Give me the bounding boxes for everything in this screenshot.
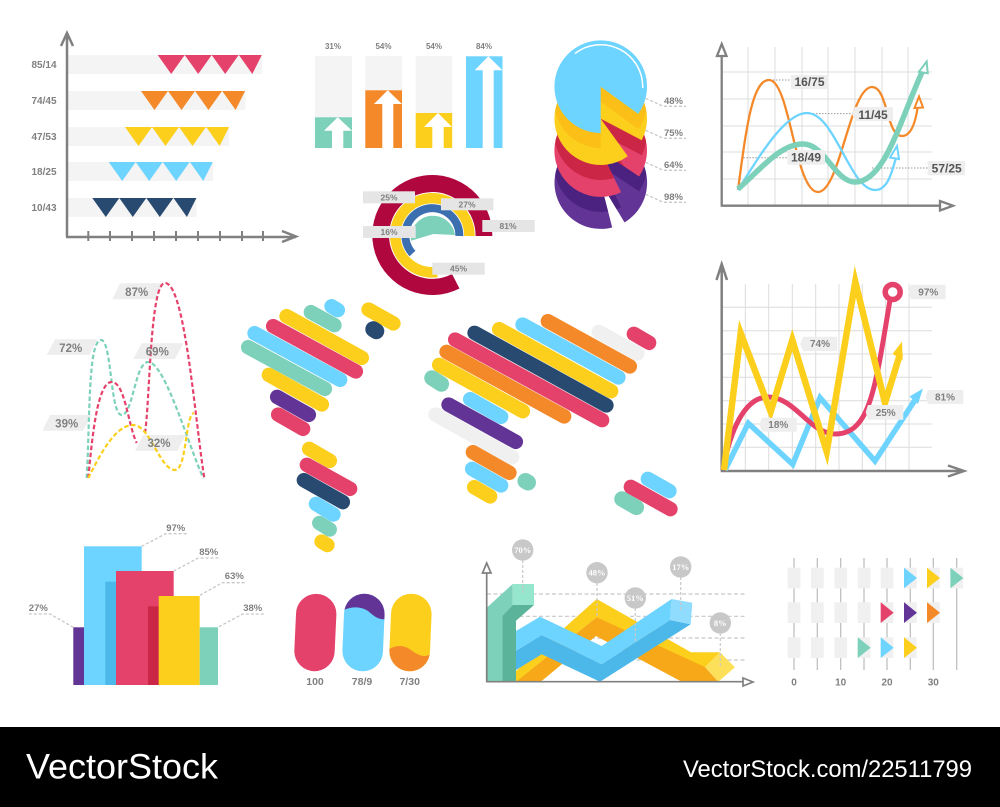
red dashed curve short bbox=[88, 382, 137, 478]
yellow ribbon bbox=[516, 599, 720, 682]
red curve with ring bbox=[723, 284, 900, 470]
callout 48%: 48% bbox=[588, 568, 606, 578]
purple bar bbox=[73, 627, 84, 685]
axis numbers: 30 bbox=[928, 678, 939, 688]
bar 31%: 31% bbox=[325, 42, 341, 51]
yellow zigzag line bbox=[724, 282, 903, 470]
axes bbox=[482, 563, 753, 686]
leader lines bbox=[27, 534, 264, 627]
callout drop lines bbox=[523, 560, 720, 667]
mint curve bbox=[738, 62, 928, 189]
blue ribbon underside bbox=[516, 620, 691, 682]
row labels: 85/14 bbox=[31, 60, 57, 71]
mint pillar dark bbox=[502, 605, 534, 682]
blue curve bbox=[738, 113, 899, 190]
axis numbers: 10 bbox=[835, 678, 847, 688]
pie labels: 64% bbox=[664, 160, 684, 171]
slider blocks bbox=[788, 568, 963, 658]
footer image id: VectorStock.com/22511799 bbox=[683, 756, 972, 783]
arrow markers row 2 bbox=[881, 602, 940, 623]
label plates bbox=[42, 283, 186, 451]
panel: stacked pie charts bbox=[554, 40, 686, 229]
blue shadow bbox=[105, 582, 116, 685]
red shadow bbox=[148, 606, 159, 685]
row labels: 10/43 bbox=[31, 203, 57, 214]
yellow pie bbox=[554, 72, 647, 165]
bar labels: 97% bbox=[166, 523, 186, 534]
row labels bbox=[31, 60, 57, 214]
percentage labels: 32% bbox=[147, 438, 171, 450]
bar labels bbox=[29, 523, 263, 614]
red dashed curve tall bbox=[145, 283, 204, 478]
axis numbers: 0 bbox=[791, 678, 797, 688]
labels: 25% bbox=[380, 192, 398, 202]
footer bar bbox=[0, 727, 1000, 807]
triangles row 10/43 bbox=[92, 198, 196, 217]
panel: smooth line chart bbox=[717, 44, 965, 210]
capsule 100: 100 bbox=[306, 676, 324, 688]
panel: capsule gauges bbox=[294, 594, 432, 685]
mint pillar side bbox=[487, 584, 513, 682]
labels: 57/25 bbox=[932, 161, 962, 175]
bar 84%: 84% bbox=[476, 42, 492, 51]
leader dots bbox=[743, 80, 928, 168]
blue zigzag line bbox=[725, 388, 923, 470]
labels bbox=[759, 285, 963, 432]
blue ribbon end bbox=[670, 599, 692, 624]
capsule 7/30: 7/30 bbox=[399, 676, 420, 688]
purple pie bbox=[555, 136, 647, 229]
callout 70% bbox=[512, 539, 533, 561]
labels: 16% bbox=[380, 227, 398, 237]
triangles row 74/45 bbox=[141, 91, 245, 110]
crimson ring bbox=[372, 175, 492, 295]
labels: 18/49 bbox=[791, 150, 821, 164]
panel: striped world map bbox=[248, 306, 670, 545]
pie labels: 75% bbox=[664, 128, 684, 139]
callout 51% bbox=[625, 587, 646, 609]
percentage labels: 39% bbox=[55, 418, 78, 430]
axes bbox=[717, 44, 953, 210]
triangles row 47/53 bbox=[125, 127, 229, 146]
callout 8% bbox=[710, 612, 731, 634]
bar labels: 27% bbox=[29, 603, 48, 614]
Eurasia and Africa stripes bbox=[432, 321, 649, 496]
triangles row 85/14 bbox=[158, 55, 262, 74]
panel: triangle row chart bbox=[31, 33, 296, 242]
blue bar bbox=[84, 546, 142, 685]
callout 17% bbox=[670, 556, 691, 578]
yellow bar bbox=[159, 596, 200, 685]
pie labels bbox=[664, 96, 684, 203]
highlight bbox=[575, 45, 643, 88]
capsule 78/9: 78/9 bbox=[352, 676, 372, 688]
panel: 3D ribbon chart bbox=[482, 539, 753, 686]
blue ring bbox=[405, 208, 459, 254]
panel: overlapping bar chart bbox=[27, 523, 264, 685]
arrow markers row 3 bbox=[858, 637, 917, 658]
axis numbers bbox=[791, 678, 939, 688]
Australia stripes bbox=[622, 479, 670, 509]
arrow markers row 1 bbox=[904, 568, 963, 588]
red pie bbox=[554, 104, 647, 197]
pie labels: 48% bbox=[664, 96, 684, 107]
labels: 16/75 bbox=[794, 75, 825, 89]
blue pie bbox=[554, 40, 647, 133]
red shadow bbox=[555, 119, 646, 180]
labels: 27% bbox=[458, 199, 476, 209]
bar 54% orange bbox=[365, 42, 402, 148]
bar 84% bbox=[466, 42, 502, 148]
panel: dashed curve chart bbox=[42, 283, 204, 478]
yellow shadow bbox=[555, 87, 646, 148]
mint dashed curve bbox=[87, 340, 203, 478]
red bar bbox=[116, 571, 174, 685]
axis numbers: 20 bbox=[881, 678, 893, 688]
footer brand: VectorStock bbox=[26, 748, 219, 787]
percentage labels: 87% bbox=[125, 287, 148, 299]
leader lines bbox=[646, 98, 686, 202]
triangles row 18/25 bbox=[109, 162, 213, 181]
grid bbox=[722, 47, 932, 205]
percentage labels: 69% bbox=[146, 346, 169, 358]
callout 51%: 51% bbox=[627, 593, 644, 603]
panel: radial donut chart bbox=[363, 175, 535, 295]
labels: 18% bbox=[768, 420, 788, 431]
bar labels: 63% bbox=[225, 571, 244, 582]
row labels: 47/53 bbox=[31, 132, 57, 143]
yellow ring bbox=[395, 198, 469, 272]
labels bbox=[788, 75, 965, 175]
bar 31% bbox=[315, 42, 352, 148]
South America stripes bbox=[304, 449, 350, 545]
labels: 45% bbox=[450, 264, 467, 274]
bar labels: 85% bbox=[199, 547, 219, 558]
grid bbox=[722, 284, 932, 471]
labels: 81% bbox=[499, 221, 517, 231]
percentage labels: 72% bbox=[59, 343, 82, 355]
callout 70%: 70% bbox=[514, 545, 531, 555]
orange ribbon underside bbox=[516, 617, 718, 682]
callout 17%: 17% bbox=[672, 562, 689, 572]
axes bbox=[716, 264, 964, 476]
panel: arrow bar chart bbox=[315, 42, 502, 148]
slider lines bbox=[794, 558, 957, 670]
bar 54% orange: 54% bbox=[375, 42, 392, 51]
purple shadow bbox=[555, 162, 646, 212]
labels: 97% bbox=[918, 288, 938, 298]
North America stripes bbox=[248, 306, 393, 429]
row labels: 18/25 bbox=[31, 167, 57, 178]
mint core bbox=[411, 216, 455, 241]
orange curve bbox=[738, 80, 923, 192]
blue ribbon top bbox=[516, 599, 672, 664]
callout 8%: 8% bbox=[714, 618, 727, 628]
labels: 25% bbox=[876, 408, 896, 419]
row backgrounds bbox=[67, 55, 262, 217]
panel: slider triangle chart bbox=[788, 558, 963, 688]
bar 54% yellow: 54% bbox=[426, 42, 442, 51]
percentage labels bbox=[55, 287, 171, 450]
axes bbox=[61, 33, 296, 242]
row labels: 74/45 bbox=[31, 96, 57, 107]
labels: 11/45 bbox=[858, 108, 888, 122]
labels: 74% bbox=[810, 339, 830, 350]
bar 54% yellow bbox=[416, 42, 452, 148]
mint pillar top bbox=[513, 584, 534, 605]
ribbon end cap bbox=[705, 652, 735, 682]
yellow dashed curve bbox=[88, 413, 194, 478]
callout 48% bbox=[586, 562, 608, 583]
panel: zigzag line chart bbox=[716, 264, 964, 476]
mint bar bbox=[200, 627, 218, 685]
dashed guide lines bbox=[487, 594, 747, 660]
bar labels: 38% bbox=[243, 603, 263, 614]
labels: 81% bbox=[935, 392, 955, 404]
labels bbox=[363, 191, 535, 275]
pie labels: 98% bbox=[664, 192, 684, 203]
